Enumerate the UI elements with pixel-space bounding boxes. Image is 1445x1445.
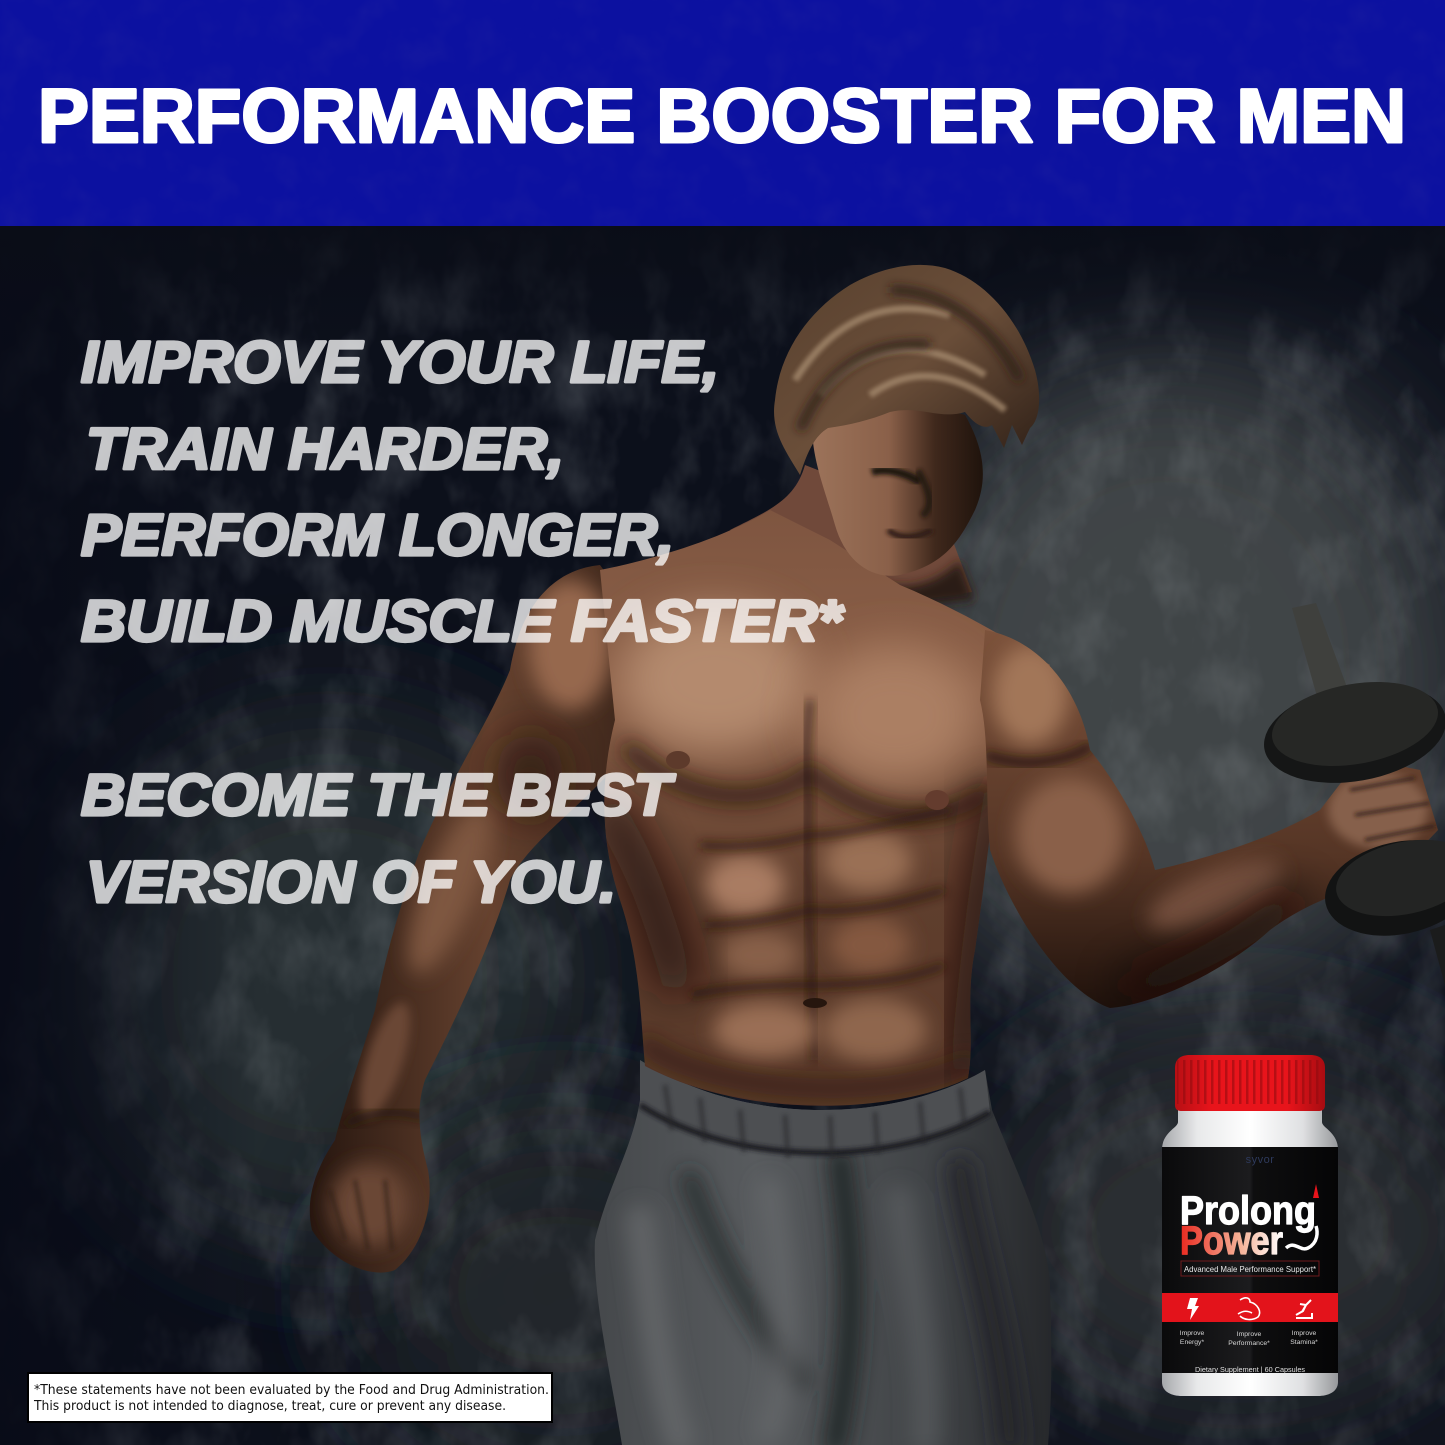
man figure — [310, 265, 1438, 1445]
benefit labels — [1180, 1330, 1318, 1347]
hair — [774, 265, 1039, 475]
product bottle — [1162, 1055, 1338, 1396]
title: PERFORMANCE BOOSTER FOR MEN — [38, 74, 1406, 159]
disclaimer box: *These statements have not been evaluated by the Food and Drug Administration. — [34, 1383, 549, 1398]
icon: muscle arm — [1238, 1298, 1260, 1320]
tagline: Advanced Male Performance Support* — [1184, 1265, 1317, 1274]
icon: runner — [1296, 1300, 1312, 1318]
tagline — [1181, 1261, 1319, 1276]
icon: lightning — [1187, 1298, 1199, 1320]
slogan text — [81, 330, 845, 915]
left arm — [310, 565, 640, 1273]
disclaimer box — [28, 1373, 552, 1422]
brand: syvor — [1246, 1154, 1274, 1166]
slogan text: BUILD MUSCLE FASTER* — [81, 589, 845, 654]
slogan text: VERSION OF YOU. — [86, 850, 616, 915]
benefit labels: Energy* — [1180, 1339, 1204, 1346]
slogan text: IMPROVE YOUR LIFE, — [81, 330, 719, 395]
head — [812, 403, 983, 576]
right arm — [980, 630, 1438, 1008]
benefit labels: Improve — [1180, 1330, 1204, 1337]
slogan text: BECOME THE BEST — [81, 763, 676, 828]
torso — [600, 510, 1050, 1106]
slogan text: PERFORM LONGER, — [81, 503, 674, 568]
red band — [1162, 1293, 1338, 1322]
product name — [1180, 1184, 1319, 1263]
product name: Prolong — [1180, 1189, 1316, 1233]
pants — [595, 1060, 1051, 1445]
benefit labels: Stamina* — [1290, 1339, 1318, 1346]
supplement facts line: Dietary Supplement | 60 Capsules — [1195, 1365, 1305, 1374]
bottle cap — [1175, 1055, 1325, 1111]
bottle body — [1162, 1110, 1338, 1396]
label — [1162, 1147, 1338, 1373]
product name: Power — [1180, 1219, 1283, 1263]
disclaimer box: This product is not intended to diagnose, treat, cure or prevent any disease. — [33, 1399, 506, 1414]
header banner — [0, 0, 1445, 226]
dumbbell — [1256, 603, 1445, 985]
benefit labels: Performance* — [1228, 1340, 1270, 1347]
slogan text: TRAIN HARDER, — [86, 417, 564, 482]
benefit labels: Improve — [1292, 1330, 1316, 1337]
benefit labels: Improve — [1237, 1331, 1261, 1338]
neck — [730, 465, 975, 610]
